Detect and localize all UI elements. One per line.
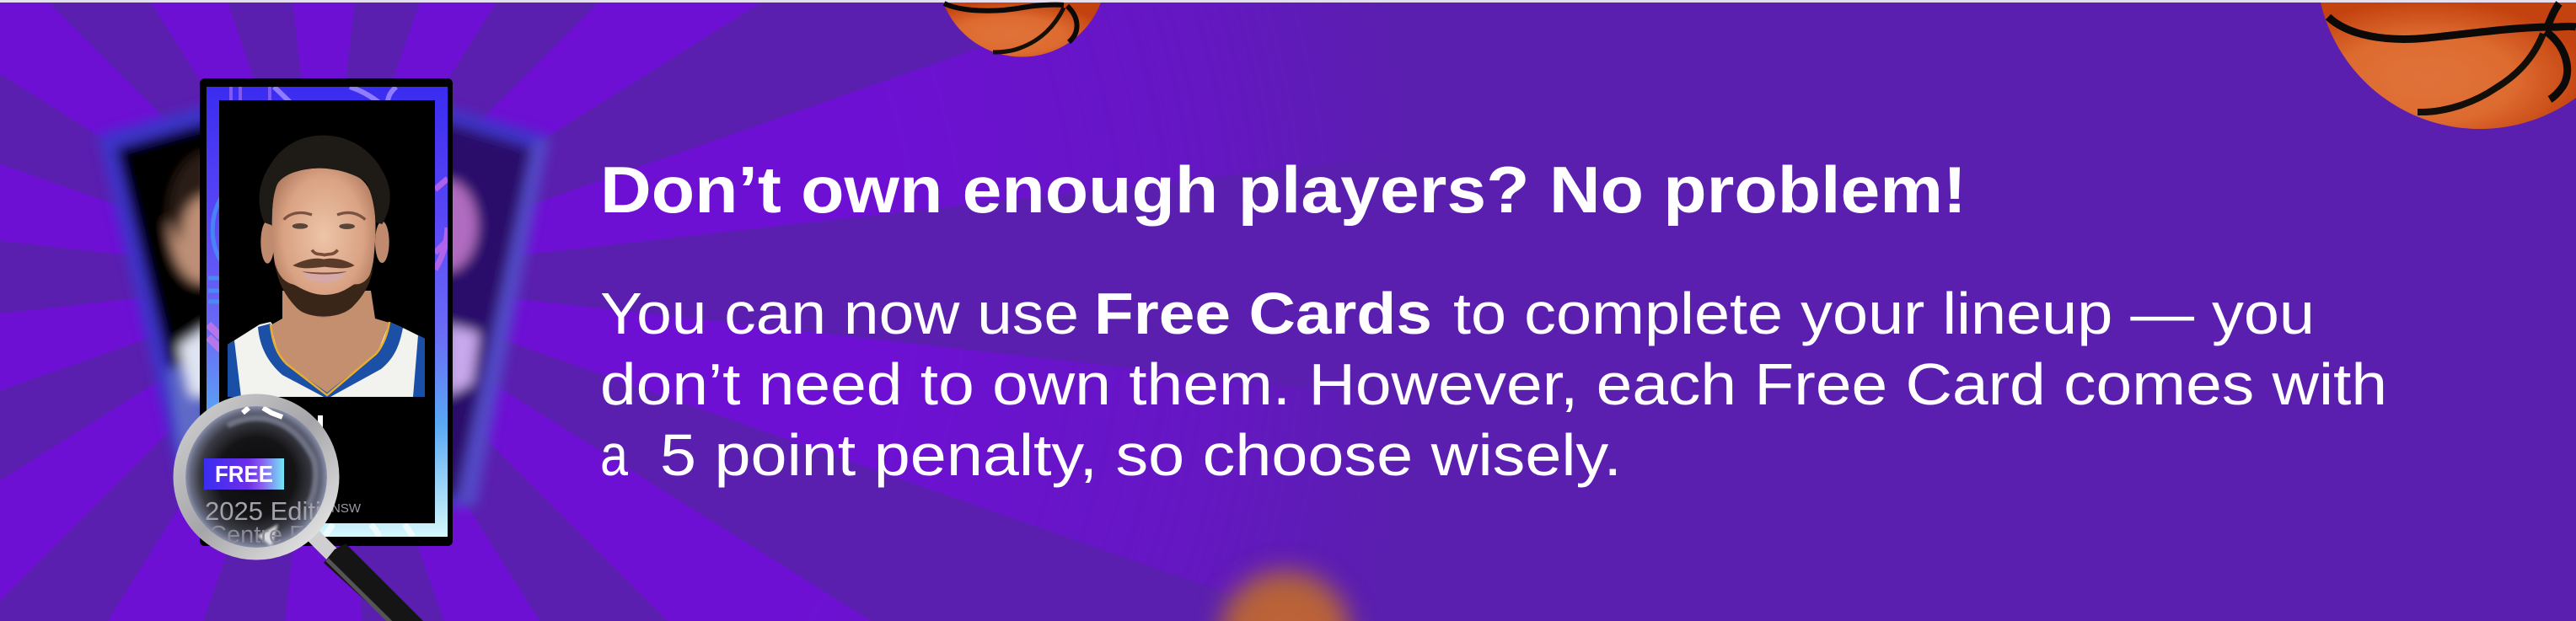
lens sub caption: Centre Fo [209, 522, 318, 549]
lens caption: 2025 Edition [205, 496, 350, 526]
line three: 5 point penalty, so choose wisely. [660, 422, 1622, 488]
line one [600, 281, 2315, 346]
heading: Don’t own enough players? No problem! [600, 153, 1967, 227]
blurred card: left [98, 93, 337, 514]
lens highlights [228, 418, 315, 506]
blurred card: right [388, 93, 550, 507]
eyes [292, 223, 308, 229]
FREE badge [204, 458, 284, 490]
nose [312, 250, 338, 255]
moustache [292, 259, 355, 268]
handle [314, 536, 438, 621]
ears [260, 221, 274, 264]
basketball: blurred bottom [1220, 570, 1351, 621]
hair [260, 136, 390, 225]
FREE badge: FREE [215, 461, 273, 487]
card team label: NSW [331, 501, 362, 516]
basketball: top centre [943, 3, 1101, 57]
neck and chest [271, 291, 389, 396]
sunburst rays [0, 3, 1318, 621]
frame swirls [208, 87, 448, 537]
line one: You can now use [600, 281, 1079, 346]
ring [180, 400, 333, 554]
player card [200, 78, 453, 546]
magnifying glass [180, 400, 438, 621]
line one: to complete your lineup — you [1453, 281, 2315, 346]
line three: a [600, 422, 628, 488]
basketball: top right [2321, 3, 2576, 129]
lens [185, 406, 327, 548]
eyebrows [284, 213, 365, 220]
mouth [302, 271, 347, 282]
line two: don’t need to own them. However, each Free Card comes with [600, 351, 2387, 417]
player photo [228, 136, 425, 397]
face [271, 168, 376, 318]
jersey [228, 322, 425, 397]
card black panel [219, 100, 435, 523]
beard [276, 264, 373, 317]
card holographic frame [207, 87, 448, 537]
top edge strip [0, 0, 2576, 3]
card name fragment [318, 415, 323, 429]
line one: Free Cards [1094, 281, 1432, 346]
head [260, 136, 390, 318]
body text [600, 281, 2387, 488]
card outer border [200, 78, 453, 546]
